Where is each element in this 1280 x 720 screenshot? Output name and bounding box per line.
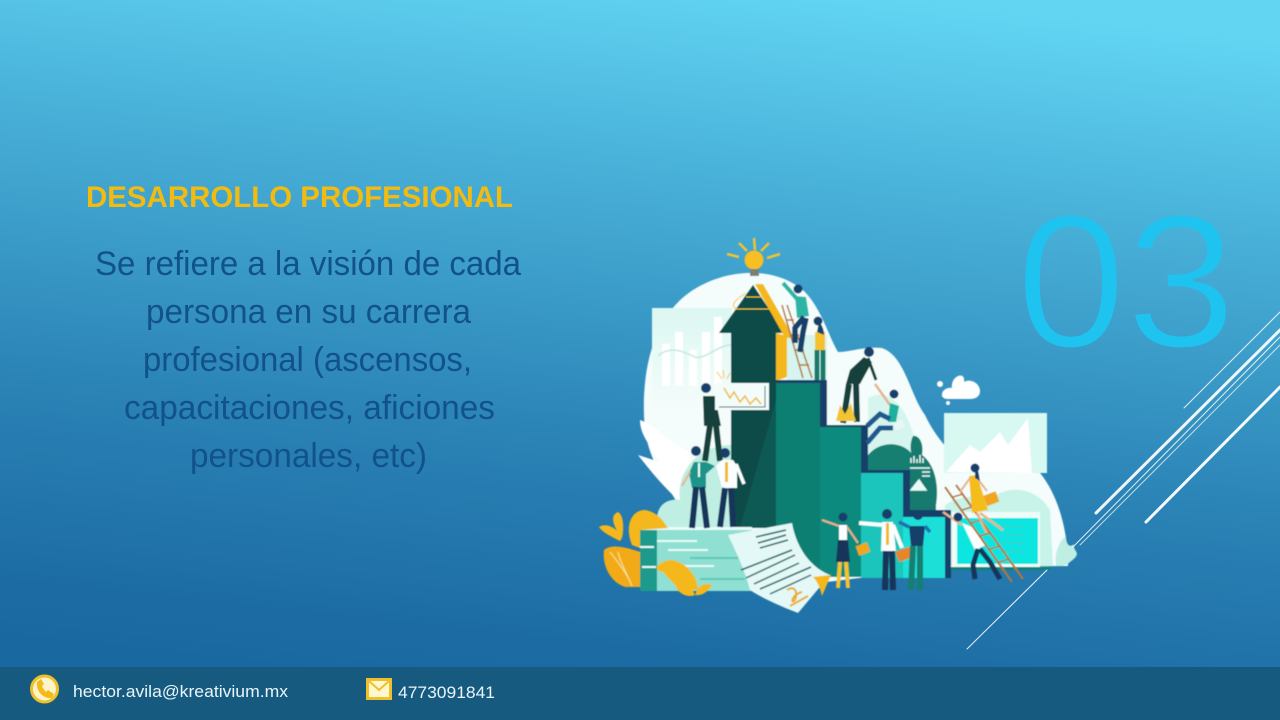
- footer bar: [0, 667, 1280, 720]
- big number 03: 03: [1016, 176, 1236, 388]
- mint hill right: [945, 490, 1053, 566]
- pale cloud behind climber: [868, 395, 915, 458]
- icon: envelope: [366, 678, 392, 700]
- chart board: [715, 383, 769, 410]
- folded corner: [813, 575, 831, 596]
- pale chart panel left: [652, 308, 732, 408]
- body text: [95, 245, 521, 475]
- yellow side panel: [776, 333, 787, 381]
- man on phone: [899, 510, 930, 590]
- growth arrow: [719, 284, 794, 528]
- body text: profesional (ascensos,: [143, 341, 472, 379]
- long ladder: [945, 485, 1023, 582]
- mint area behind ladder: [787, 335, 827, 381]
- stair steps: [776, 380, 951, 578]
- lightbulb: [727, 238, 780, 276]
- yellow plant on step: [836, 403, 856, 421]
- gourd plant: [910, 436, 937, 517]
- yellow arrow edge: [755, 284, 794, 338]
- chart mountain: [946, 418, 1032, 473]
- arrow rope: [733, 293, 770, 309]
- stack of books: [640, 527, 752, 591]
- mint hill behind pair: [657, 445, 731, 528]
- body text: capacitaciones, aficiones: [124, 389, 495, 427]
- woman by ladder: [814, 316, 825, 380]
- man in white shirt: [716, 448, 744, 527]
- man pointing: [859, 509, 913, 590]
- man holding ladder: [943, 512, 1000, 579]
- white cloud backdrop: [644, 273, 1068, 590]
- right chart panel: [944, 413, 1047, 473]
- illustration: career growth: [599, 238, 1077, 613]
- computer screen: [950, 512, 1050, 570]
- email text: hector.avila@kreativium.mx: [73, 682, 289, 701]
- body text: Se refiere a la visión de cada: [95, 245, 521, 283]
- small right plant: [1056, 536, 1077, 566]
- phone number text: 4773091841: [398, 683, 495, 702]
- pale bars: [662, 317, 722, 386]
- man in teal shirt: [682, 446, 715, 528]
- cloud dots: [937, 381, 950, 405]
- cloud: [942, 375, 980, 399]
- man with chart: [701, 370, 769, 461]
- signed document: [728, 523, 831, 613]
- mint hill mid: [868, 444, 915, 470]
- pale wave line: [658, 345, 731, 357]
- left white leaves: [638, 420, 690, 510]
- icon: phone: [32, 676, 58, 702]
- woman in yellow dress: [960, 464, 1003, 533]
- yellow plants: [599, 510, 712, 596]
- signature: [787, 588, 808, 606]
- woman with bag: [822, 512, 870, 588]
- body text: persona en su carrera: [146, 293, 471, 331]
- gourd chart marks: [910, 455, 930, 490]
- diagonal decorative lines: [967, 312, 1280, 649]
- body text: personales, etc): [190, 437, 427, 475]
- climbing person: [867, 384, 905, 443]
- person on ladder top: [782, 283, 812, 378]
- man on top step: [843, 347, 876, 423]
- title: DESARROLLO PROFESIONAL: [86, 181, 513, 214]
